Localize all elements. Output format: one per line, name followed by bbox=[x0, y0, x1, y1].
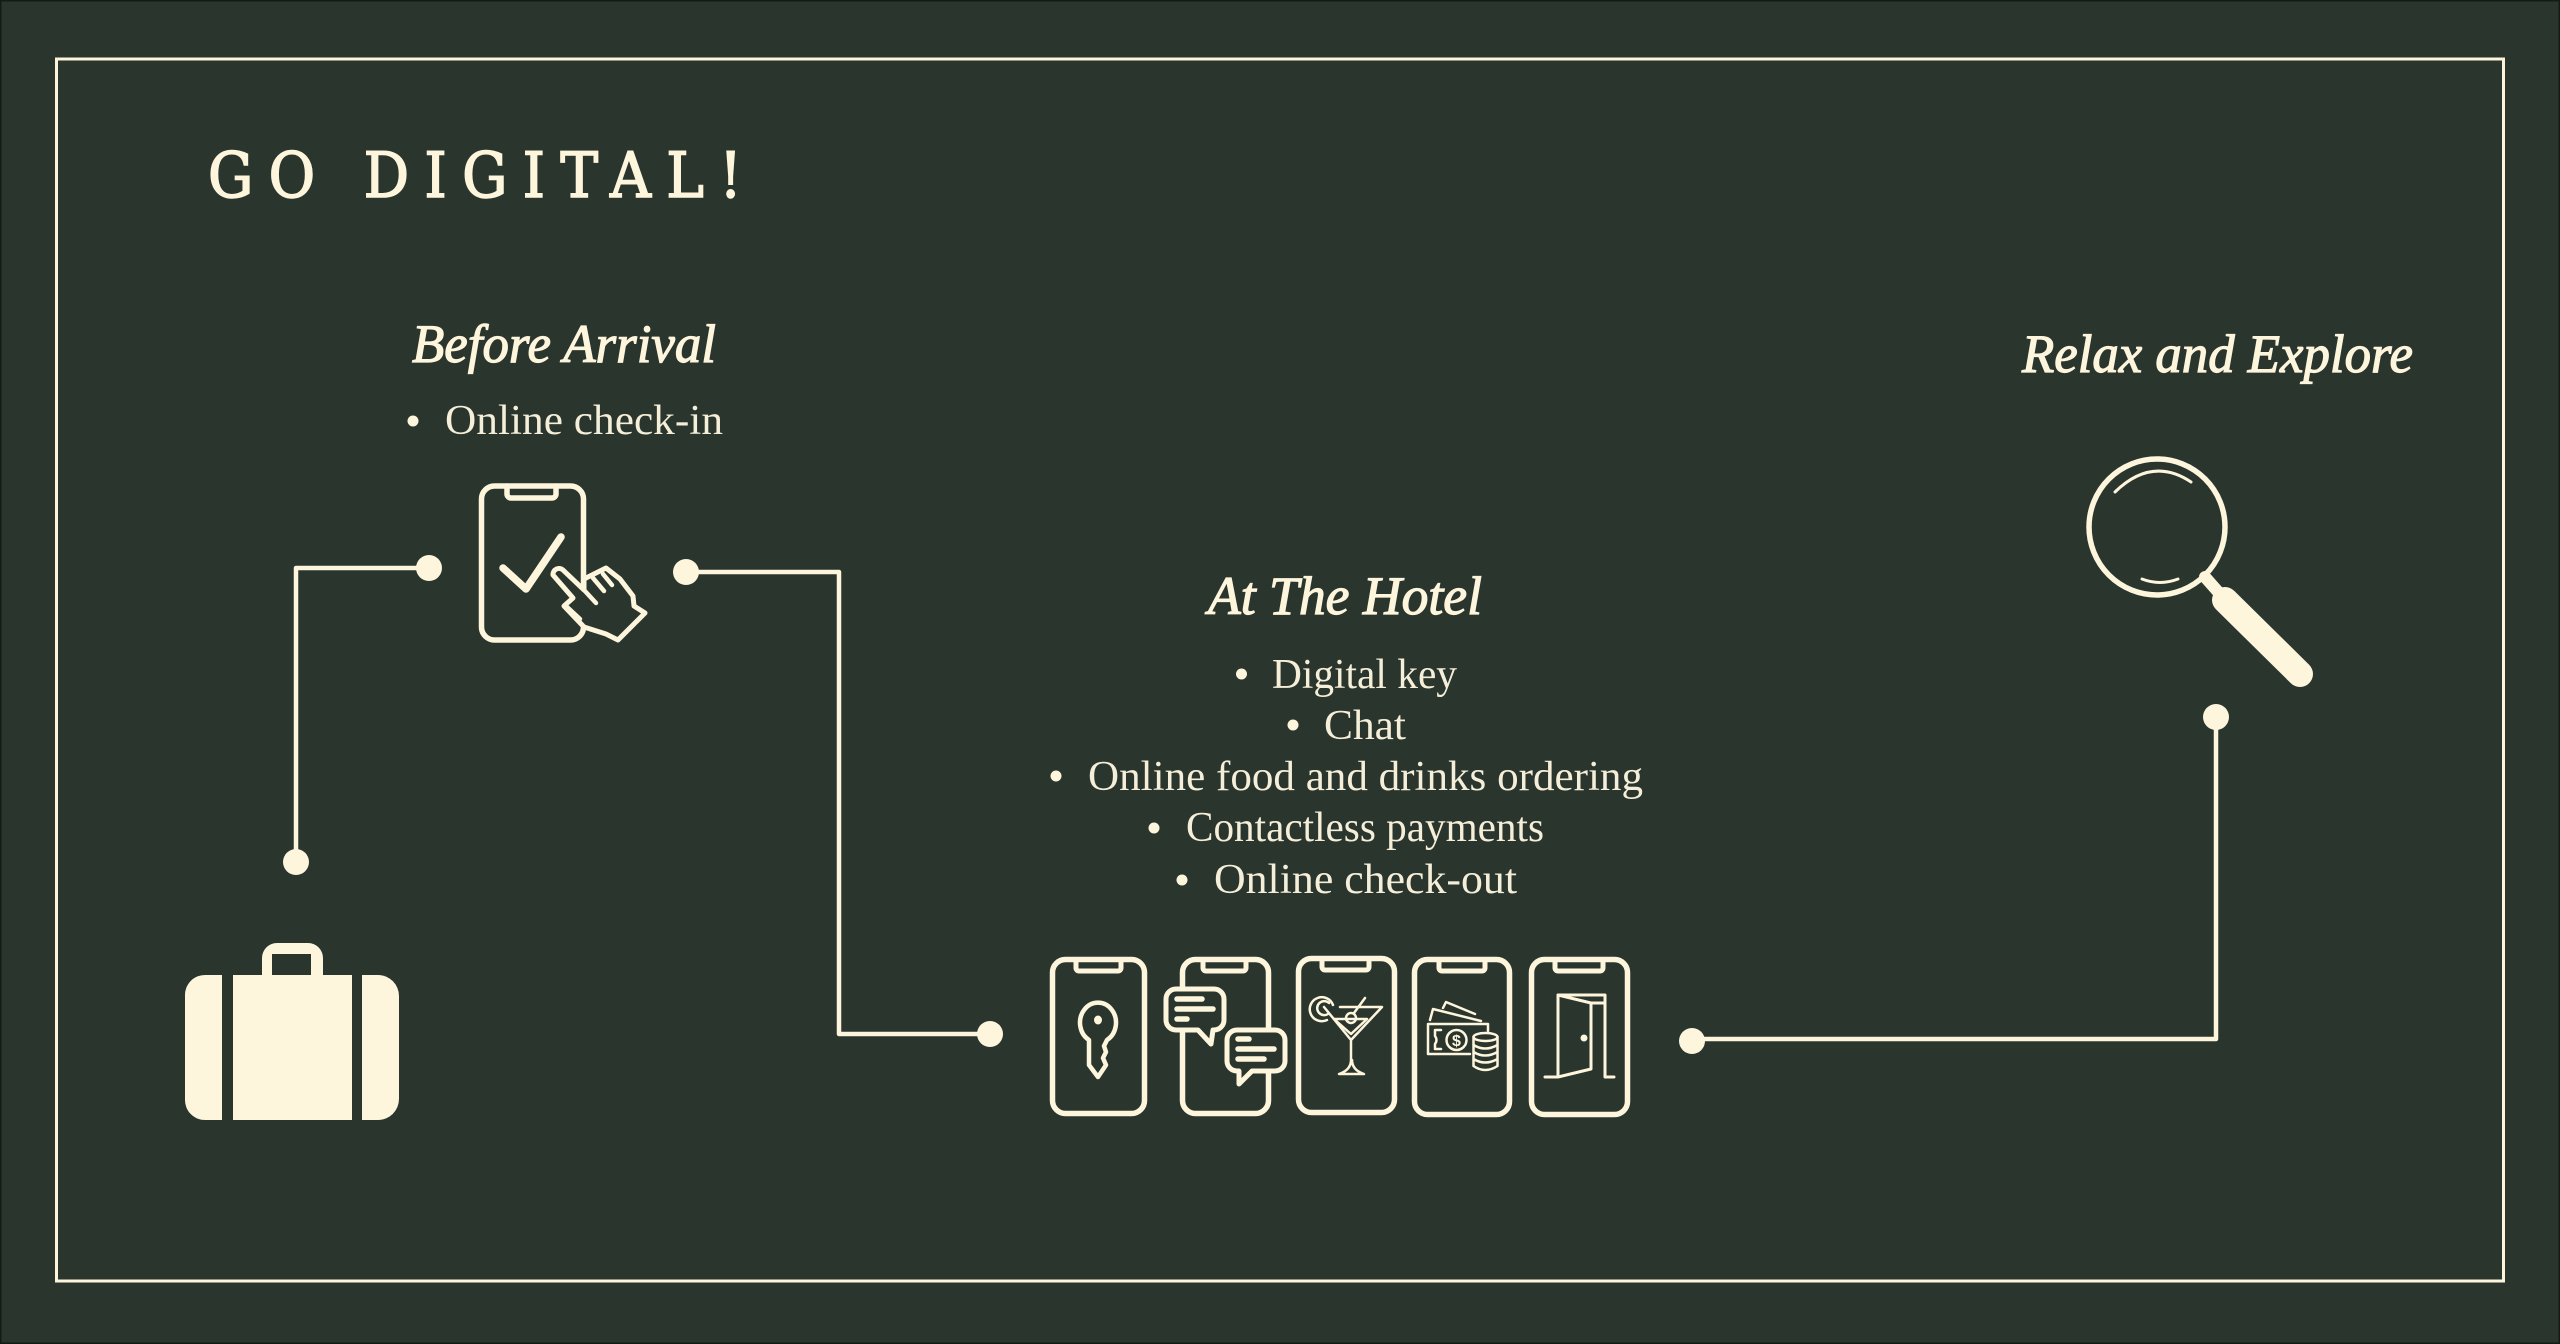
icon: magnifying glass bbox=[2089, 459, 2300, 674]
list item: online check-out: Online check-out bbox=[1214, 857, 1517, 903]
icon: phone with door bbox=[1532, 960, 1628, 1114]
list item: digital key: Digital key bbox=[1272, 652, 1457, 698]
title: GO DIGITAL! bbox=[208, 139, 742, 212]
text: online check-in: Online check-in bbox=[445, 398, 723, 444]
icon: suitcase bbox=[185, 943, 399, 1120]
list item: online food and drinks ordering: Online food and drinks ordering bbox=[1088, 754, 1643, 800]
connector: before arrival to at the hotel bbox=[673, 559, 1003, 1047]
icon: phone with digital key bbox=[1052, 960, 1144, 1114]
connector: suitcase to before arrival bbox=[283, 555, 442, 875]
icon: phone with cocktail bbox=[1298, 958, 1394, 1112]
icon: phone with chat bubbles bbox=[1166, 960, 1285, 1114]
heading: at the hotel: At The Hotel bbox=[1205, 566, 1482, 626]
icon: phone with check and hand bbox=[482, 486, 645, 640]
list item: contactless payments: Contactless payments bbox=[1186, 805, 1544, 851]
icon: phone with money: $ bbox=[1452, 1033, 1461, 1050]
icon: phone with money bbox=[1414, 960, 1510, 1114]
connector: at the hotel to relax and explore bbox=[1679, 704, 2229, 1054]
list: at the hotel features bbox=[1050, 652, 1643, 903]
list item: chat: Chat bbox=[1324, 703, 1406, 749]
list item: chat bbox=[1288, 703, 1406, 749]
heading: before arrival: Before Arrival bbox=[412, 314, 716, 374]
heading: relax and explore: Relax and Explore bbox=[2021, 324, 2413, 384]
